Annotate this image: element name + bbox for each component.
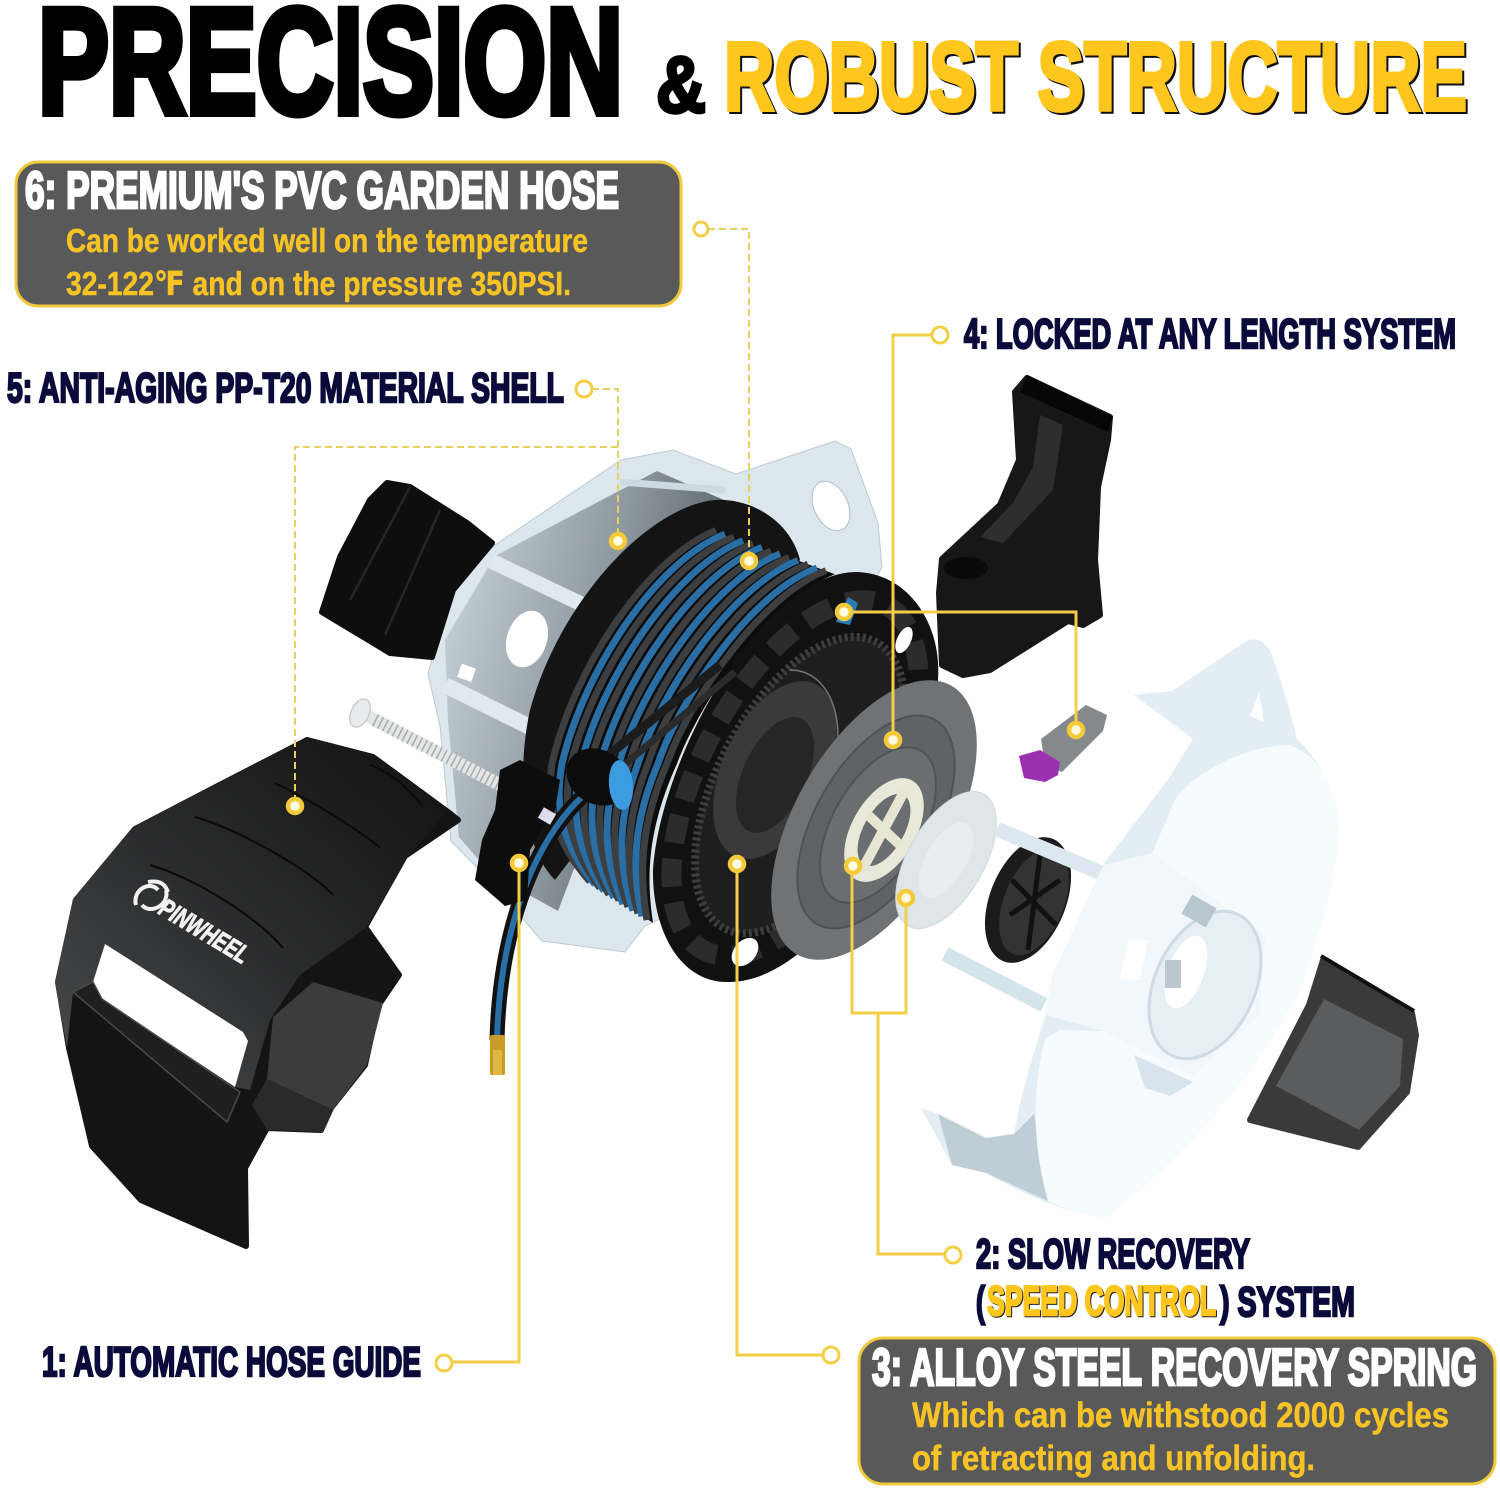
panel 3 body line 2: of retracting and unfolding. bbox=[912, 1439, 1315, 1478]
panel 6 heading: 6: PREMIUM'S PVC GARDEN HOSE bbox=[25, 162, 619, 220]
label 2: ) SYSTEM bbox=[1220, 1278, 1355, 1325]
cream plastic wheel bbox=[828, 765, 940, 895]
product: back flange bbox=[523, 500, 800, 880]
connector: lock label 4 bbox=[837, 327, 1083, 747]
connector: guide label 1 bbox=[436, 856, 526, 1371]
product: back shell bbox=[428, 441, 882, 952]
panel 6 body line 2: 32-122℉ and on the pressure 350PSI. bbox=[66, 265, 571, 302]
speed control highlight: SPEED CONTROL bbox=[987, 1277, 1216, 1324]
label 2 bbox=[976, 1230, 1355, 1325]
connector: spring label 3 bbox=[730, 857, 839, 1363]
label 1: 1: AUTOMATIC HOSE GUIDE bbox=[42, 1338, 421, 1385]
product: hose guide bbox=[475, 665, 735, 906]
product: right top handle bbox=[939, 375, 1113, 675]
product: left cover with brand bbox=[55, 737, 458, 1246]
title bbox=[38, 0, 1467, 145]
shell guide bars bbox=[945, 829, 1106, 1005]
brand name: PINWHEEL bbox=[154, 892, 255, 970]
product: gray disc bbox=[729, 647, 1019, 993]
panel 3 body line 1: Which can be withstood 2000 cycles bbox=[912, 1396, 1449, 1435]
product: locking lever bbox=[1019, 705, 1107, 782]
title ampersand: & bbox=[656, 40, 706, 129]
connector: shell label 5 bbox=[288, 381, 625, 813]
label 2: ( bbox=[976, 1278, 985, 1325]
panel 6 body line 1: Can be worked well on the temperature bbox=[66, 222, 588, 259]
product: dangling hose with brass fitting bbox=[490, 790, 590, 1075]
product: translucent disc bbox=[875, 775, 1017, 945]
product: threaded rod bbox=[346, 696, 506, 788]
panel: premium PVC garden hose bbox=[16, 162, 681, 306]
label 2: 2: SLOW RECOVERY bbox=[976, 1230, 1250, 1277]
panel: alloy steel recovery spring bbox=[859, 1338, 1495, 1484]
brand name bbox=[135, 881, 255, 970]
product: front white shell bbox=[921, 639, 1338, 1217]
product: right bottom handle bbox=[1250, 956, 1416, 1147]
product: hose coil bbox=[550, 530, 835, 923]
product: left handle bbox=[322, 483, 492, 657]
connector: hose label 6 bbox=[694, 222, 756, 568]
label 5: 5: ANTI-AGING PP-T20 MATERIAL SHELL bbox=[7, 364, 564, 411]
connector: speed control label 2 bbox=[846, 859, 961, 1263]
product: small black disc bbox=[968, 825, 1088, 975]
product: front flange and spring bbox=[620, 562, 970, 994]
